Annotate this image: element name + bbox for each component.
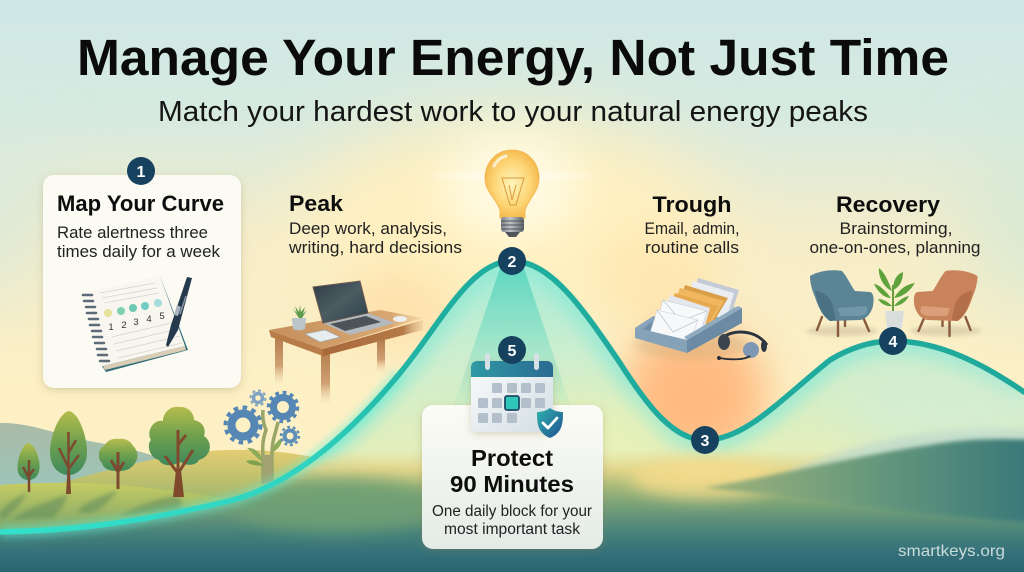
badge 3 (691, 426, 719, 454)
icon: notepad (305, 330, 340, 342)
icon: notebook and pen: 4 (146, 314, 152, 325)
icon: mouse (393, 316, 407, 322)
heading: trough: Trough (652, 192, 732, 217)
text: trough description (644, 220, 740, 257)
text: peak description (288, 220, 462, 257)
light cone under peak (452, 268, 572, 410)
watermark: smartkeys.org (898, 543, 1005, 560)
under-curve glow and ground (0, 250, 1024, 572)
icon: inbox tray (634, 278, 750, 359)
round tree 3 (99, 439, 137, 489)
badge 2 (498, 247, 526, 275)
text: peak description: Deep work, analysis, (289, 220, 447, 238)
icon: notebook and pen: 1 (108, 322, 114, 333)
subtitle: Match your hardest work to your natural energy peaks (158, 96, 868, 128)
badge 4: 4 (889, 334, 898, 351)
badge 5 (498, 336, 526, 364)
heading: recovery: Recovery (836, 192, 941, 217)
text: protect description: most important task (444, 521, 580, 538)
tall tree 2 (50, 411, 87, 494)
text: map your curve description (57, 224, 221, 261)
text: map your curve description: Rate alertness three (57, 224, 208, 242)
badge 3: 3 (701, 433, 710, 450)
icon: calendar (471, 353, 563, 438)
text: map your curve description: times daily for a week (57, 243, 221, 261)
icon: desk with laptop (269, 281, 423, 404)
icon: orange armchair (910, 270, 982, 336)
badge 2: 2 (508, 254, 517, 271)
icon: notebook and pen (83, 276, 192, 372)
panel: map your curve (43, 175, 241, 388)
icon: teal armchair (806, 270, 878, 336)
heading: protect 90 minutes: 90 Minutes (450, 471, 574, 497)
icon: laptop (313, 281, 395, 335)
badge 1: 1 (137, 164, 146, 181)
text: protect description (432, 503, 592, 538)
text: protect description: One daily block for your (432, 503, 592, 520)
text: recovery description: one-on-ones, planning (810, 239, 980, 257)
icon: notebook and pen: 3 (133, 317, 139, 328)
heading: protect 90 minutes: Protect (471, 445, 553, 471)
icon: small gear (250, 390, 266, 406)
middle hill (35, 450, 360, 510)
energy curve (0, 261, 1024, 532)
heading: protect 90 minutes (450, 445, 574, 497)
tree shadows (0, 490, 182, 520)
icon: upper gear (268, 392, 298, 422)
distant left mountain (0, 423, 190, 500)
text: recovery description: Brainstorming, (840, 220, 952, 238)
text: trough description: routine calls (645, 239, 739, 257)
icon: potted plant (874, 268, 915, 328)
text: trough description: Email, admin, (644, 220, 740, 238)
plant with gears (226, 390, 299, 484)
icon: notebook and pen: 5 (159, 311, 165, 322)
icon: desk plant (292, 305, 307, 330)
heading: peak: Peak (289, 191, 344, 216)
badge 1 (127, 157, 155, 185)
badge 4 (879, 327, 907, 355)
small tree 1 (18, 443, 40, 492)
icon: lower gear (281, 427, 299, 445)
text: peak description: writing, hard decisions (288, 239, 462, 257)
badge 5: 5 (508, 343, 517, 360)
panel: protect 90 minutes (422, 405, 603, 549)
icon: large gear (226, 408, 260, 442)
heading: map your curve: Map Your Curve (57, 191, 224, 216)
text: recovery description (810, 220, 980, 257)
title: Manage Your Energy, Not Just Time (77, 29, 949, 86)
foreground left hill (0, 483, 245, 545)
icon: shield with check (537, 408, 563, 438)
icon: light bulb (485, 150, 539, 237)
icon: headset (717, 332, 767, 360)
large tree 4 (149, 407, 210, 497)
icon: notebook and pen: 2 (121, 320, 127, 331)
